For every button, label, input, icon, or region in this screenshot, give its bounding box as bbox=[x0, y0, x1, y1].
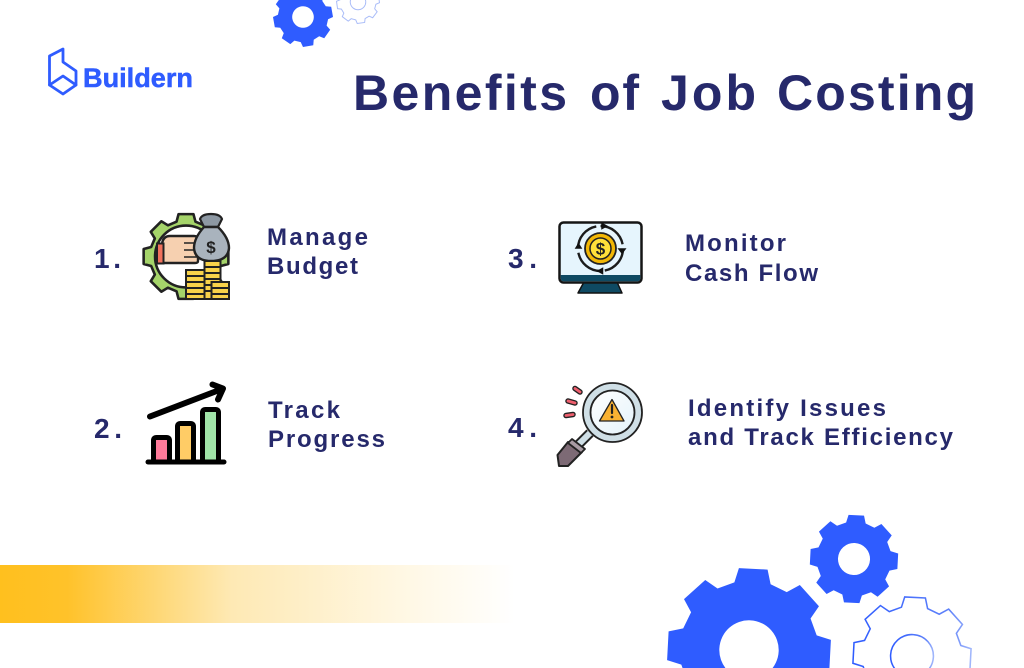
title: Job bbox=[661, 65, 756, 121]
label: Manage Budget bbox=[267, 224, 368, 280]
item 1: Manage Budget bbox=[94, 214, 368, 299]
label: Identify Issues and Track Efficiency: Identify Issues bbox=[688, 395, 886, 422]
label: Identify Issues and Track Efficiency bbox=[688, 395, 954, 451]
logo: Buildern bbox=[50, 49, 193, 94]
icon: top solid gear bbox=[273, 0, 333, 47]
label: Track Progress: Track bbox=[268, 397, 341, 424]
icon: medium solid gear bbox=[808, 513, 900, 605]
icon: gear, hand and money bag: $ bbox=[206, 238, 216, 257]
number 3: 3. bbox=[508, 243, 537, 274]
label: Monitor Cash Flow bbox=[685, 230, 818, 287]
title: Costing bbox=[777, 65, 976, 121]
title bbox=[353, 65, 976, 121]
title: of bbox=[590, 65, 639, 121]
item 2: Track Progress bbox=[94, 384, 385, 462]
label: Track Progress: Progress bbox=[268, 426, 385, 453]
label: Manage Budget: Budget bbox=[267, 253, 358, 280]
item 4: Identify Issues and Track Efficiency bbox=[508, 383, 954, 466]
item 3: Monitor Cash Flow bbox=[508, 222, 818, 293]
background gradient band bbox=[0, 565, 515, 623]
icon: large solid gear bbox=[667, 568, 831, 668]
icon: outline gear bbox=[852, 596, 972, 668]
number 1: 1. bbox=[94, 243, 121, 274]
icon: magnifier with warning sign bbox=[558, 383, 642, 466]
label: Identify Issues and Track Efficiency: and Track Efficiency bbox=[688, 424, 954, 451]
icon: rising bar chart bbox=[148, 384, 224, 462]
icon: top outline gear bbox=[336, 0, 380, 24]
icon: gear, hand and money bag bbox=[144, 214, 229, 299]
number 2: 2. bbox=[94, 413, 122, 444]
number 4: 4. bbox=[508, 412, 537, 443]
logo wordmark: Buildern bbox=[83, 63, 193, 93]
label: Monitor Cash Flow: Monitor bbox=[685, 230, 786, 257]
icon: monitor with dollar coin: $ bbox=[596, 240, 606, 258]
label: Monitor Cash Flow: Cash Flow bbox=[685, 260, 818, 287]
label: Track Progress bbox=[268, 397, 385, 453]
logo icon bbox=[50, 49, 76, 94]
icon: monitor with dollar coin bbox=[560, 222, 642, 293]
title: Benefits bbox=[353, 65, 567, 121]
label: Manage Budget: Manage bbox=[267, 224, 368, 251]
